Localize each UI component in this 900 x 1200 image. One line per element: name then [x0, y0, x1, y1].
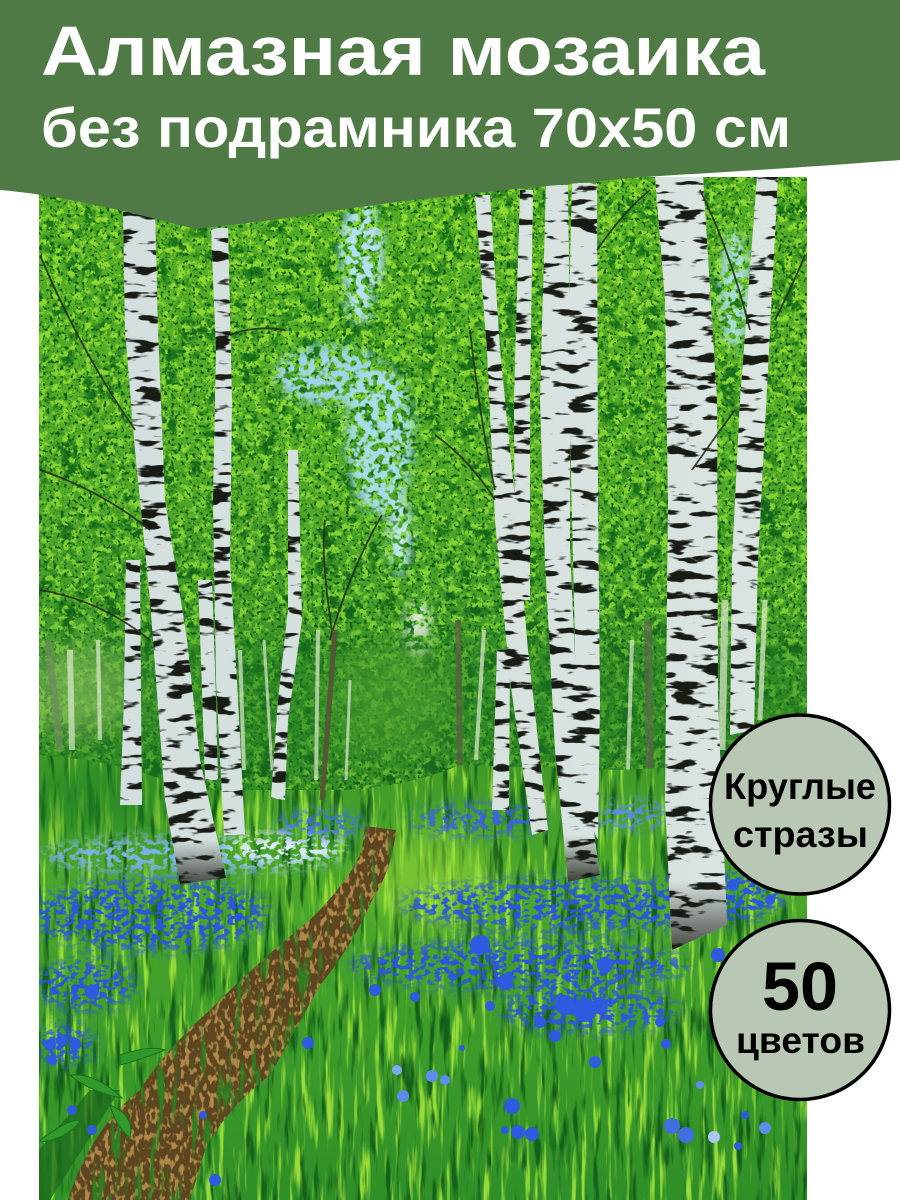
title line 1: Алмазная мозаика [41, 12, 766, 90]
product photo: birch forest [25, 177, 807, 1200]
distant tree trunks [48, 600, 765, 790]
title line 2: без подрамника 70х50 см [41, 96, 791, 159]
grass meadow [25, 755, 807, 1200]
foliage background [39, 177, 807, 817]
branches [40, 190, 805, 800]
badge: round rhinestones: стразы [733, 814, 868, 855]
darker lower forest [25, 640, 807, 770]
badge: round rhinestones [710, 715, 890, 894]
green title banner [0, 0, 900, 229]
badge: 50 colours: цветов [736, 1020, 865, 1061]
foreground flowers [44, 879, 775, 1186]
banner shape [0, 0, 900, 229]
dirt path [39, 826, 396, 1200]
blue flower drifts [30, 801, 790, 1065]
badge: round rhinestones: Круглые [724, 766, 876, 807]
sky gaps [275, 200, 751, 660]
badge: 50 colours: 50 [762, 948, 838, 1025]
badge: 50 colours [710, 920, 890, 1100]
birch trunks [120, 177, 778, 950]
left foreground plant [40, 1048, 165, 1142]
